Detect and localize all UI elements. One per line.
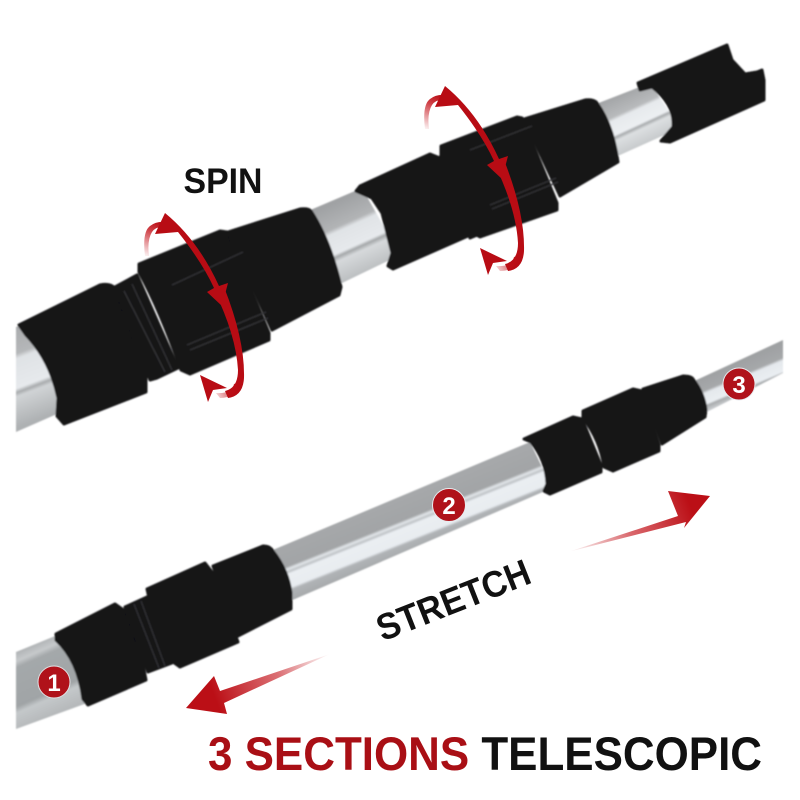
section badge 2: 2 xyxy=(442,493,456,520)
faded lower arc xyxy=(496,255,520,271)
section badge 3 xyxy=(723,368,755,400)
STRETCH label: STRETCH xyxy=(371,552,536,649)
threaded section left xyxy=(115,275,178,380)
bottom left sleeve xyxy=(213,546,291,636)
left sleeve xyxy=(228,209,341,330)
section badge 1 xyxy=(38,666,70,698)
curved tail xyxy=(494,160,524,271)
right collar grooves xyxy=(470,126,558,209)
curved tail xyxy=(214,287,244,398)
bottom pole tube section 2 xyxy=(268,442,552,602)
right collar xyxy=(441,117,557,237)
far end cap xyxy=(638,45,764,142)
mid sleeve xyxy=(643,376,706,444)
collar groove lines xyxy=(124,252,268,372)
stretch arrow right xyxy=(568,491,710,552)
spin arrow left xyxy=(144,213,244,402)
section badge 3: 3 xyxy=(732,372,746,399)
threads right joint xyxy=(440,152,482,238)
spin arrow right xyxy=(424,86,524,275)
section badge 2 xyxy=(432,488,466,522)
faded lower arc xyxy=(216,382,240,398)
top pole middle tube xyxy=(308,188,400,292)
faded return arc xyxy=(424,95,446,129)
mid cap xyxy=(524,417,601,494)
mid collar xyxy=(583,389,659,471)
arrow body with heads xyxy=(155,213,228,306)
right sleeve xyxy=(524,100,618,196)
SPIN label: SPIN xyxy=(184,162,262,201)
top telescopic pole being spun xyxy=(16,45,764,432)
thread grooves xyxy=(134,601,165,668)
bottom left cap xyxy=(56,604,146,705)
bottom left collar xyxy=(147,563,238,667)
middle cap xyxy=(356,154,468,269)
bottom pole tube section 1 xyxy=(16,634,90,729)
left end cap xyxy=(19,284,146,424)
headline: 3 SECTIONS TELESCOPIC xyxy=(208,727,762,780)
lower head xyxy=(200,375,227,402)
left collar xyxy=(139,231,269,374)
top pole left tube xyxy=(16,310,90,432)
faded return arc xyxy=(144,222,166,256)
bottom telescopic pole extended xyxy=(16,340,783,729)
section badge 1: 1 xyxy=(47,670,61,697)
top pole right tube xyxy=(596,83,680,158)
bottom left threads xyxy=(125,597,172,672)
bottom pole tube section 3 xyxy=(690,340,783,414)
arrow body with heads xyxy=(435,86,508,179)
stretch arrow left xyxy=(186,654,330,714)
lower head xyxy=(480,248,507,275)
